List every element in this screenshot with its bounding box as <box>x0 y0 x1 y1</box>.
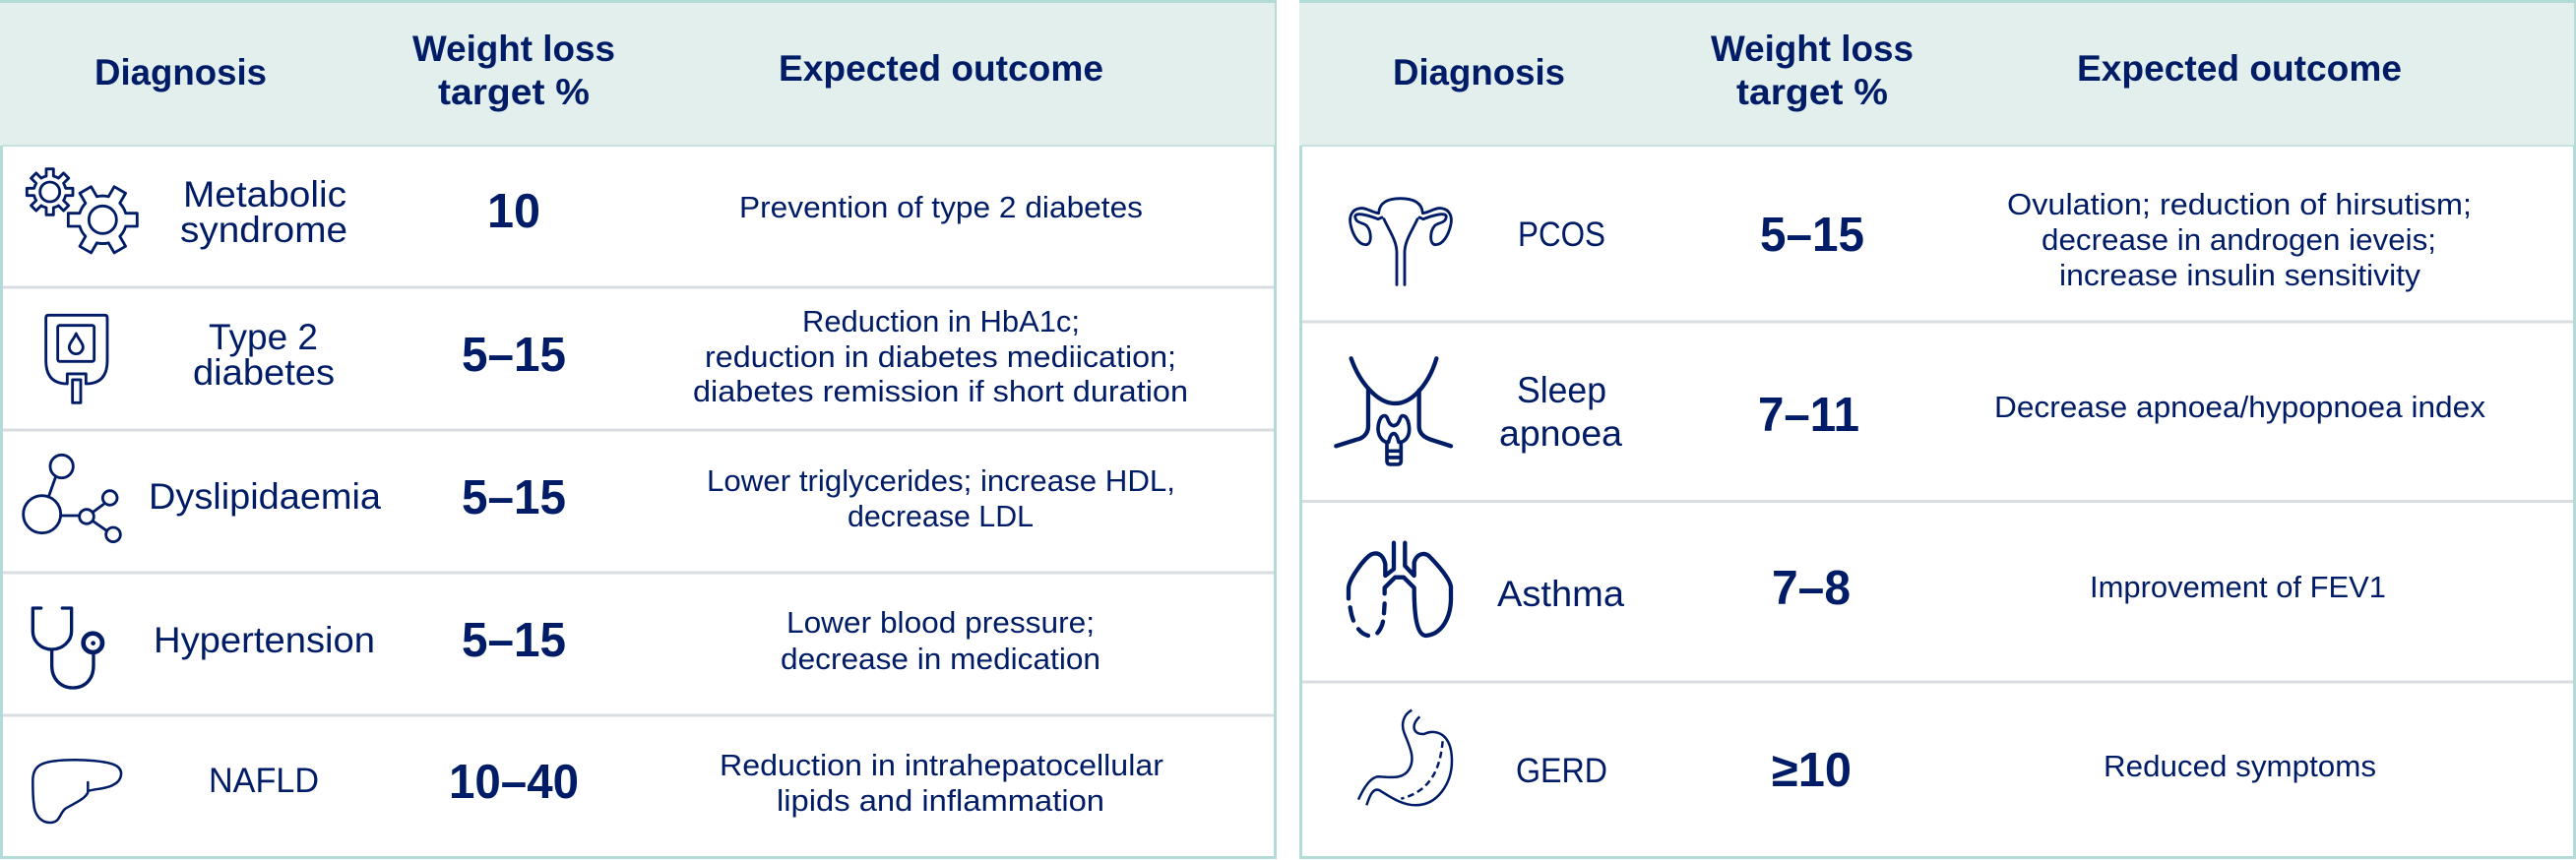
value: 10: 10 <box>487 185 540 238</box>
heading: Weight loss target: Weight loss <box>412 29 615 69</box>
outcome: Ovulation: decrease in androgen ieveis; <box>2042 222 2436 257</box>
icon: gears <box>27 169 137 253</box>
label: Dyslipidaemia: Dyslipidaemia <box>149 476 381 517</box>
heading: Weight loss target: target % <box>438 72 590 112</box>
heading: Diagnosis: Diagnosis <box>94 52 267 92</box>
value: ≥10: ≥10 <box>1772 744 1852 797</box>
outcome: Ovulation <box>2007 187 2472 292</box>
outcome: Improvement of FEV1: Improvement of FEV1 <box>2090 570 2386 604</box>
value: 5–15: 5–15 <box>462 614 566 667</box>
value: 5–15: 5–15 <box>462 329 566 382</box>
heading: Expected outcome: Expected outcome <box>2077 48 2402 89</box>
heading: Weight loss target <box>1711 29 1914 112</box>
label: Metabolic syndrome: Metabolic <box>183 174 346 215</box>
heading: Diagnosis: Diagnosis <box>1393 52 1565 92</box>
outcome: Reduced symptoms: Reduced symptoms <box>2104 749 2376 783</box>
icon: stethoscope <box>32 608 102 688</box>
outcome: Reduction in HbA1c: reduction in diabetes mediication; <box>705 339 1176 374</box>
icon: throat and thyroid <box>1336 358 1451 464</box>
icon: glucose meter <box>46 315 107 402</box>
icon: lungs <box>1349 543 1451 636</box>
icon: stomach <box>1358 710 1452 805</box>
outcome: Lower blood pressure: decrease in medication <box>781 642 1100 676</box>
panel: other obesity-related diagnoses table <box>1299 2 2575 858</box>
label: Type 2 diabetes <box>193 317 335 393</box>
value: 5–15: 5–15 <box>1760 209 1864 262</box>
icon: uterus <box>1351 199 1451 284</box>
heading: Weight loss target: target % <box>1736 72 1888 112</box>
label: Hypertension: Hypertension <box>154 620 375 660</box>
label: Type 2 diabetes: Type 2 <box>209 317 318 357</box>
outcome: Reduction in HbA1c <box>693 304 1188 408</box>
outcome: Reduction in intrahepatocellular lipids <box>720 748 1163 818</box>
value: 7–8: 7–8 <box>1772 562 1851 615</box>
label: Sleep apnoea <box>1499 370 1622 454</box>
value: 10–40: 10–40 <box>449 756 579 809</box>
heading: Weight loss target: Weight loss <box>1711 29 1914 69</box>
label: Asthma: Asthma <box>1497 574 1624 614</box>
outcome: Prevention of type 2 diabetes: Prevention of type 2 diabetes <box>739 190 1143 224</box>
label: Metabolic syndrome <box>180 174 347 250</box>
label: Type 2 diabetes: diabetes <box>193 352 335 393</box>
outcome: Lower blood pressure <box>781 605 1100 676</box>
label: Metabolic syndrome: syndrome <box>180 210 347 250</box>
outcome: Lower triglycerides <box>707 463 1175 533</box>
panel: obesity-related metabolic diagnoses table <box>0 2 1276 858</box>
outcome: Reduction in intrahepatocellular lipids: lipids and inflammation <box>777 783 1104 818</box>
label: Sleep apnoea: apnoea <box>1499 413 1622 454</box>
outcome: Ovulation: increase insulin sensitivity <box>2059 258 2421 292</box>
icon: molecule <box>24 455 120 542</box>
heading: Weight loss target <box>412 29 615 112</box>
outcome: Lower blood pressure: Lower blood pressure; <box>786 605 1095 640</box>
outcome: Reduction in intrahepatocellular lipids: Reduction in intrahepatocellular <box>720 748 1163 782</box>
label: NAFLD: NAFLD <box>209 762 319 800</box>
value: 7–11: 7–11 <box>1758 389 1859 442</box>
outcome: Lower triglycerides: decrease LDL <box>848 499 1034 533</box>
outcome: Lower triglycerides: Lower triglycerides; increase HDL, <box>707 463 1175 498</box>
outcome: Decrease apnoea/hypopnoea index: Decrease apnoea/hypopnoea index <box>1994 390 2486 424</box>
outcome: Reduction in HbA1c: Reduction in HbA1c; <box>802 304 1080 338</box>
label: Sleep apnoea: Sleep <box>1517 370 1606 410</box>
value: 5–15: 5–15 <box>462 471 566 524</box>
heading: Expected outcome: Expected outcome <box>779 48 1103 89</box>
outcome: Reduction in HbA1c: diabetes remission if short duration <box>693 374 1188 408</box>
outcome: Ovulation: Ovulation; reduction of hirsutism; <box>2007 187 2472 221</box>
label: GERD: GERD <box>1516 752 1607 790</box>
label: PCOS: PCOS <box>1518 215 1605 254</box>
icon: liver <box>32 760 121 823</box>
